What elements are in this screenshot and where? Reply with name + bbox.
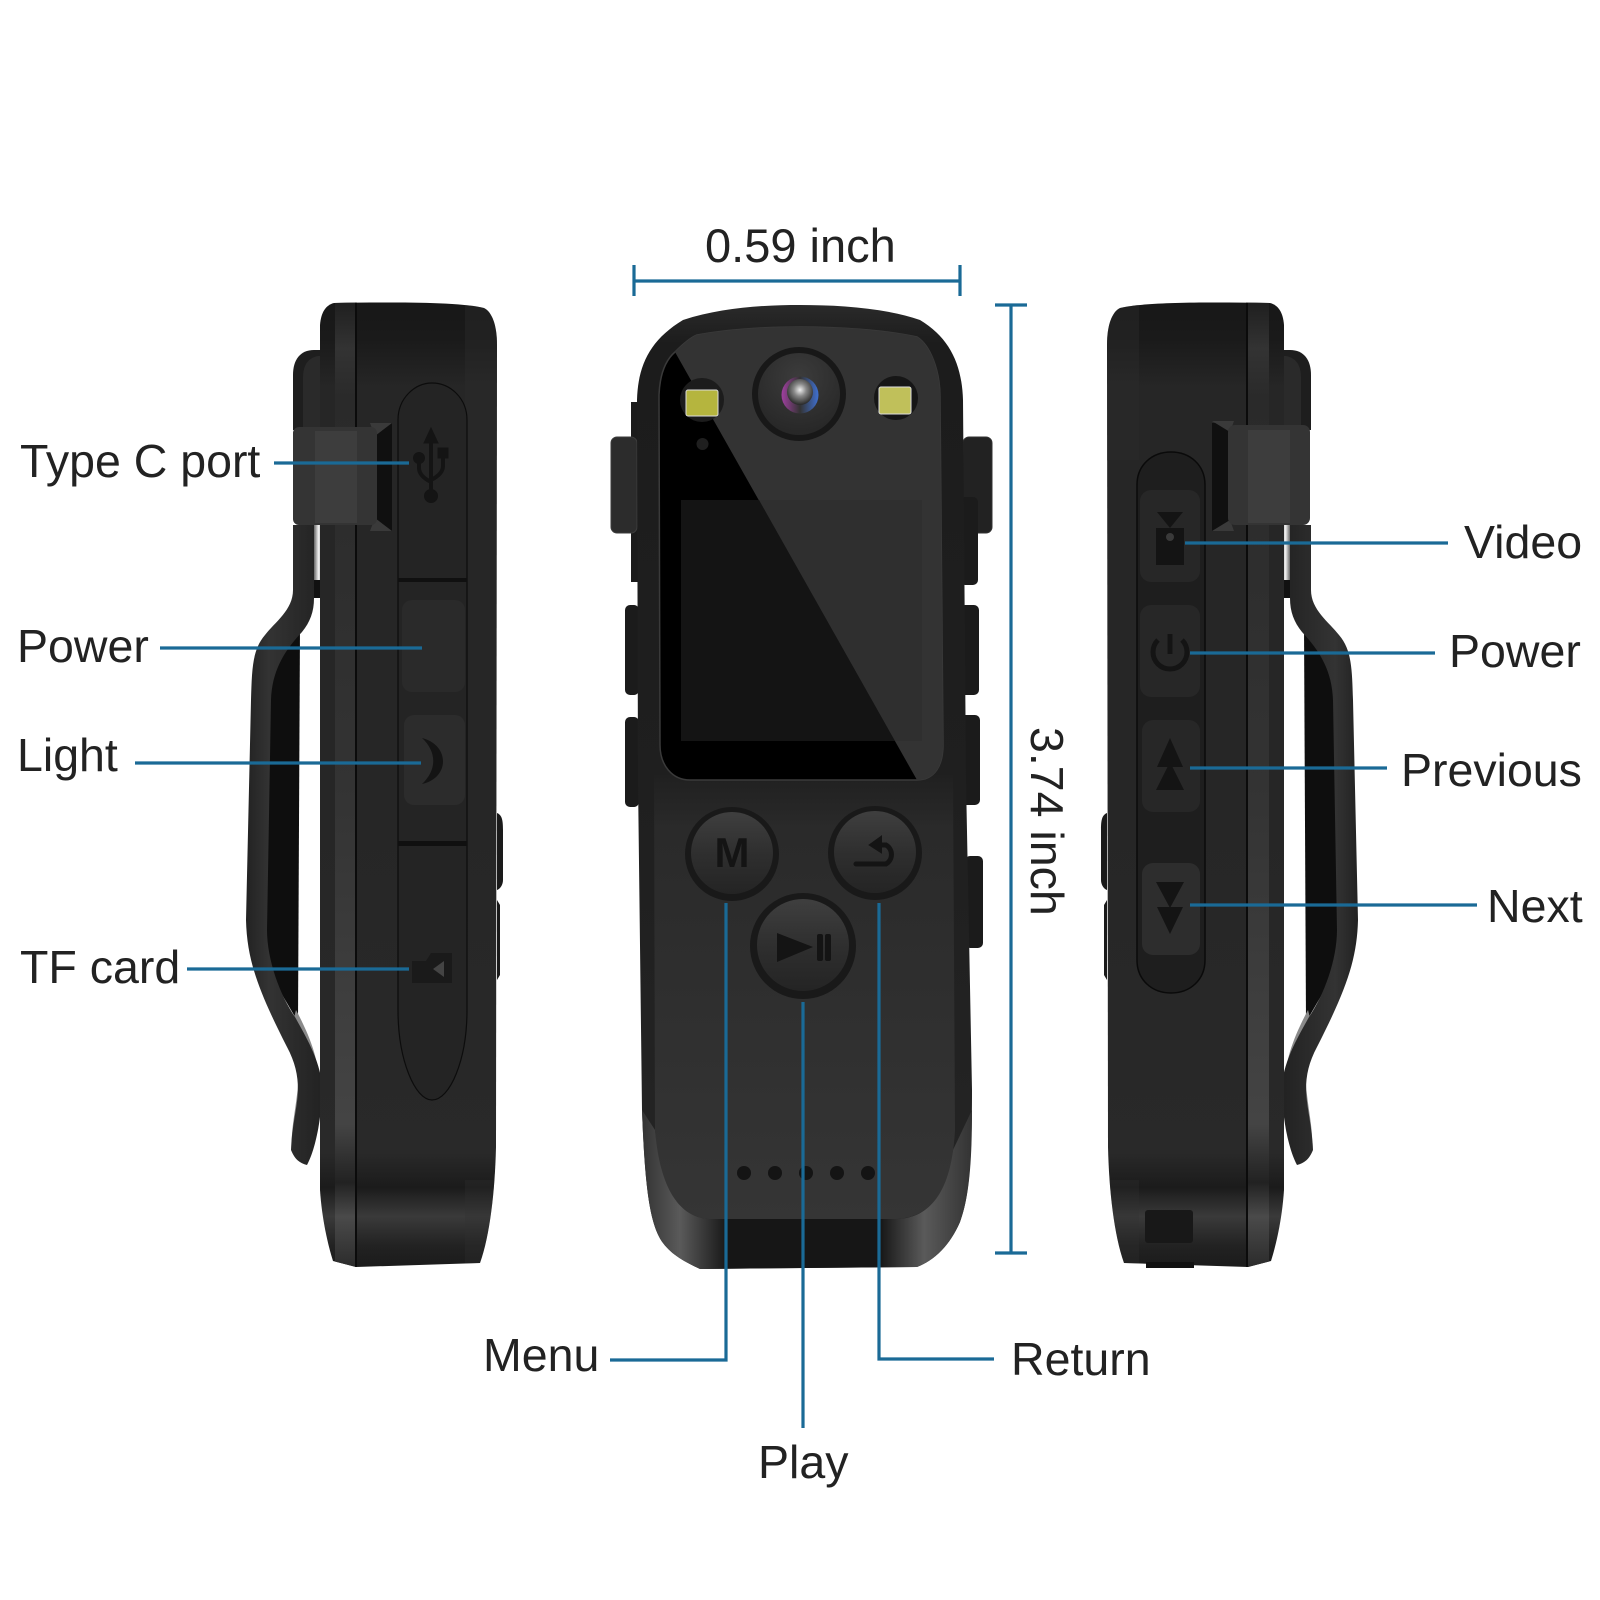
glass screen panel bbox=[659, 327, 943, 780]
LCD display bbox=[681, 500, 922, 741]
callout: Power right: Power bbox=[1449, 625, 1581, 677]
lower face panel bbox=[654, 775, 955, 1219]
port cover panel bbox=[398, 383, 467, 1100]
belt clip and body, right view bbox=[1101, 300, 1358, 1270]
bottom port, right view bbox=[1145, 1210, 1194, 1268]
left side view of camera bbox=[246, 300, 503, 1270]
height dimension bbox=[995, 305, 1073, 1253]
microphone hole bbox=[696, 438, 708, 450]
side bumps bbox=[497, 813, 503, 980]
callout: Return: Return bbox=[1011, 1333, 1151, 1385]
infographic canvas bbox=[20, 228, 1582, 1488]
width dimension bbox=[634, 219, 960, 296]
camera body, front view bbox=[637, 305, 972, 1269]
callout: TF card: TF card bbox=[20, 941, 180, 993]
right side view of camera bbox=[1101, 300, 1358, 1270]
bottom chin bbox=[642, 1110, 972, 1269]
callout: Light: Light bbox=[17, 729, 118, 781]
camera body, left view bbox=[318, 300, 500, 1270]
callout: Type C port: Type C port bbox=[20, 435, 260, 487]
height dimension: 3.74 inch bbox=[1021, 727, 1073, 916]
icon: USB Type C port bbox=[414, 428, 448, 502]
clip block, right view bbox=[1212, 421, 1310, 531]
callout: Video: Video bbox=[1464, 516, 1582, 568]
menu button bbox=[685, 807, 779, 901]
light button with moon icon bbox=[404, 715, 465, 805]
callout: Previous: Previous bbox=[1401, 744, 1582, 796]
left LED bbox=[680, 378, 724, 422]
side buttons, front view bbox=[611, 402, 992, 948]
belt clip, left view bbox=[246, 350, 324, 1165]
front view of camera bbox=[611, 305, 992, 1269]
previous button bbox=[1142, 720, 1200, 812]
button panel, right view bbox=[1137, 452, 1205, 993]
clip block, left view bbox=[293, 423, 392, 531]
speaker dots bbox=[737, 1166, 875, 1180]
power button, right view bbox=[1140, 605, 1200, 697]
callout: Return bbox=[879, 903, 1151, 1385]
callout: Menu: Menu bbox=[483, 1329, 599, 1381]
icon: TF card bbox=[412, 953, 452, 983]
callout: Next: Next bbox=[1487, 880, 1583, 932]
callout: Play: Play bbox=[758, 1436, 849, 1488]
play button bbox=[750, 893, 856, 999]
power button, left view bbox=[402, 600, 465, 692]
return button bbox=[828, 806, 922, 900]
right LED bbox=[874, 376, 918, 420]
next button bbox=[1142, 863, 1200, 955]
callout: Menu bbox=[483, 903, 726, 1381]
width dimension: 0.59 inch bbox=[705, 219, 896, 272]
video button bbox=[1140, 490, 1200, 582]
camera lens bbox=[752, 347, 846, 441]
callout: Power left: Power bbox=[17, 620, 149, 672]
menu button: M bbox=[714, 829, 750, 876]
